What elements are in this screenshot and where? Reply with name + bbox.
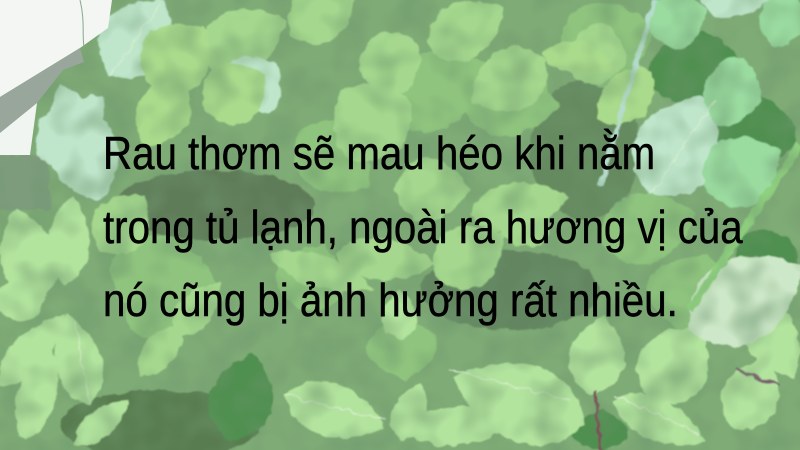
caption text: trong tủ lạnh, ngoài ra hương vị của — [103, 200, 743, 252]
caption text: nó cũng bị ảnh hưởng rất nhiều. — [103, 274, 678, 326]
caption text: Rau thơm sẽ mau héo khi nằm — [103, 127, 655, 179]
caption text — [103, 127, 743, 326]
